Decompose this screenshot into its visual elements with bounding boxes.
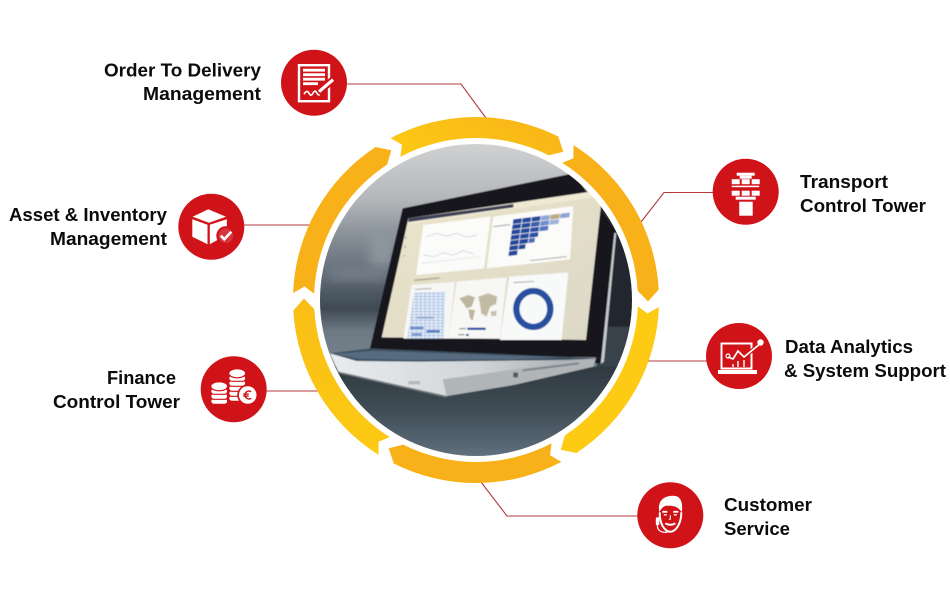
heading: data analytics and system support: Data Analytics bbox=[785, 337, 913, 357]
circular arrow ring bbox=[251, 64, 701, 536]
icon: signed document bbox=[281, 50, 347, 116]
connector: data analytics bbox=[648, 360, 707, 362]
icon: headset agent bbox=[637, 482, 703, 548]
arrow segment: top bbox=[385, 64, 569, 226]
heading: finance control tower: Control Tower bbox=[53, 392, 180, 412]
laptop keyboard deck bbox=[330, 348, 602, 362]
item: asset and inventory management bbox=[9, 194, 244, 260]
item: transport control tower bbox=[713, 159, 926, 225]
connector: finance control tower bbox=[266, 390, 319, 392]
heading: asset and inventory management: Management bbox=[50, 229, 167, 249]
icon: coin stacks with euro bbox=[201, 356, 267, 422]
connector: asset and inventory bbox=[244, 224, 310, 226]
dashboard panel: table heat cells bbox=[403, 282, 455, 339]
sidebar dots bbox=[404, 237, 406, 257]
connector: order to delivery bbox=[347, 84, 486, 118]
heading: asset and inventory management: Asset & Inventory bbox=[9, 205, 167, 225]
connector: customer service bbox=[481, 482, 638, 516]
dashboard panel: line chart bbox=[416, 217, 491, 275]
icon: box with check bbox=[178, 194, 244, 260]
heading: data analytics and system support: & System Support bbox=[784, 361, 946, 381]
heading: customer service: Customer bbox=[724, 495, 812, 515]
heading: finance control tower bbox=[53, 368, 180, 412]
icon: control tower bbox=[713, 159, 779, 225]
heading: data analytics and system support bbox=[784, 337, 946, 381]
dashboard panel: heatmap bbox=[487, 206, 573, 268]
arrow segment: upper left bbox=[251, 141, 434, 303]
heading: transport control tower: Transport bbox=[800, 172, 888, 192]
central photo: laptop with dashboard bbox=[317, 143, 640, 460]
laptop base bbox=[330, 353, 596, 396]
item: data analytics and system support bbox=[706, 323, 946, 389]
arrow segment: bottom bbox=[383, 374, 567, 536]
heading: asset and inventory management bbox=[9, 205, 167, 249]
heading: order to delivery management: Order To Delivery bbox=[104, 60, 261, 80]
dashboard panel: donut chart bbox=[500, 272, 568, 340]
item: order to delivery management bbox=[104, 50, 347, 116]
laptop lid bbox=[370, 173, 616, 363]
icon: laptop with trend line bbox=[706, 323, 772, 389]
heading: order to delivery management: Management bbox=[143, 84, 261, 104]
laptop screen bbox=[382, 190, 603, 340]
panel titles bbox=[414, 278, 439, 280]
arrow segment: lower right bbox=[518, 297, 701, 459]
connector: transport control tower bbox=[641, 192, 713, 222]
item: finance control tower bbox=[53, 356, 267, 422]
arrow segment: lower left bbox=[293, 298, 390, 455]
heading: finance control tower: Finance bbox=[107, 368, 176, 388]
heading: customer service bbox=[724, 495, 812, 539]
heading: customer service: Service bbox=[724, 519, 790, 539]
heading: transport control tower bbox=[800, 172, 926, 216]
arrow segment: upper right bbox=[562, 145, 659, 302]
dashboard panel: world map bbox=[448, 277, 507, 339]
heading: order to delivery management bbox=[104, 60, 261, 104]
item: customer service bbox=[637, 482, 812, 548]
photo background bbox=[320, 144, 598, 368]
heading: transport control tower: Control Tower bbox=[800, 196, 926, 216]
